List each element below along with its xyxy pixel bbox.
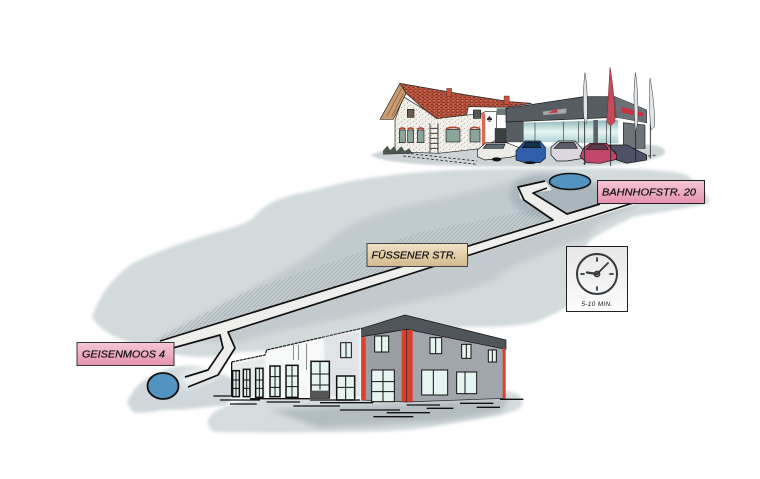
icon: clock [577,254,617,294]
flags [583,67,655,166]
white wing [232,328,362,400]
label: Füssener Str. [367,244,468,266]
background terrain [92,168,710,433]
label: Bahnhofstr. 20 [598,180,704,204]
house gable timber [380,83,406,119]
road network [160,181,640,387]
label: Geisenmoos 4: GEISENMOOS 4 [82,350,165,360]
clock: 5-10 min.: 5-10 MIN. [581,301,613,308]
label: Bahnhofstr. 20: BAHNHOFSTR. 20 [602,188,696,198]
label: Füssener Str.: FÜSSENER STR. [372,250,456,262]
road hatching [150,205,556,342]
ground dashes [383,151,657,164]
ground shadow [370,145,665,167]
house roof [400,83,532,119]
upper windows [341,336,496,402]
house tower [482,112,497,147]
shrubs [383,146,412,154]
gray right wall [407,329,505,402]
building: workshop (Geisenmoos) [213,315,523,417]
lower ground under building [208,390,522,433]
showroom fascia [506,97,647,123]
gray centre wall [362,329,407,402]
wing doors [233,361,355,400]
showroom right block [623,123,645,148]
clock: 5-10 min. [566,246,628,312]
showroom glass [523,120,618,143]
house windows [399,109,481,143]
roof fascia [362,315,506,349]
showroom logo [543,108,567,115]
house wall [395,97,483,153]
left lower lobe [127,366,240,413]
darker ground behind the road [150,178,640,345]
ground hatch [213,396,523,417]
ladder [430,123,438,153]
red stripes [362,330,506,402]
showroom left pillar [506,120,523,142]
marker: Bahnhofstr. [550,174,590,190]
label: Geisenmoos 4 [77,342,174,366]
building: car dealership (Bahnhofstr.) [370,67,665,167]
building: car dealership (Bahnhofstr.): ♣ [487,114,493,124]
wing shading [323,331,360,397]
marker: Geisenmoos [148,373,178,399]
cars [477,141,647,163]
